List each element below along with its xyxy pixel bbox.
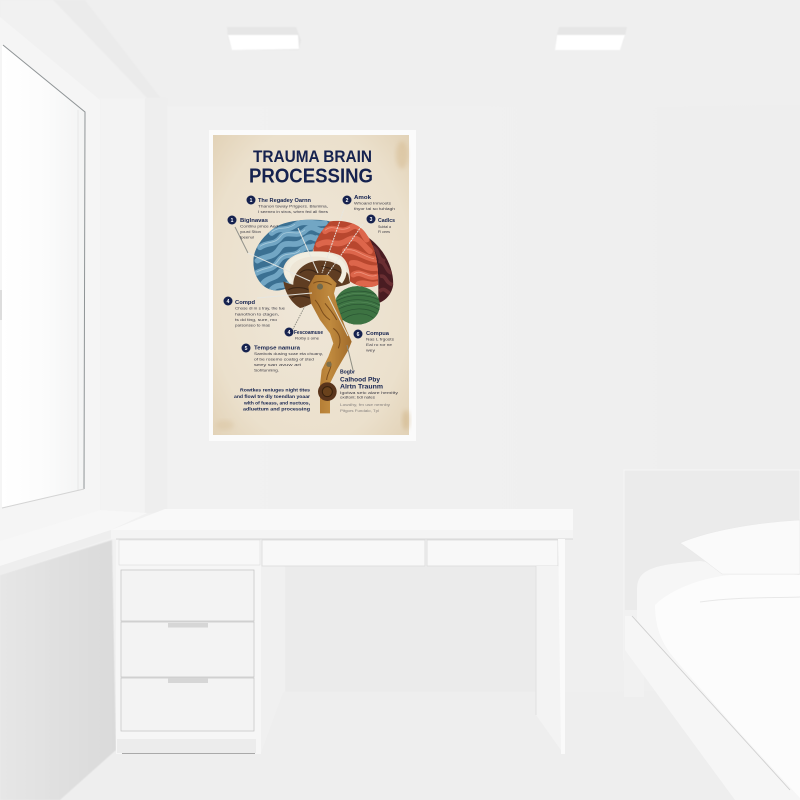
label: compua: Nas L frgosts (366, 336, 394, 342)
label: fescoamuse (284, 328, 323, 340)
label: tempse namura: Sambots dusing scae eta chuany, (254, 351, 323, 356)
label: compd (224, 296, 285, 328)
label: amok: Whoand Innvoots (354, 200, 391, 206)
label: amok: Amok (354, 195, 371, 201)
dark rear lobe (368, 238, 394, 303)
label: compua: Compua (366, 331, 390, 337)
callout: childhood after trauma: Pitgors Fundalo, Tpl (340, 408, 379, 413)
label: biglnavas: Ipeenul (240, 234, 254, 240)
label: cadlcs: Fl cees (378, 229, 390, 234)
headboard (624, 470, 800, 697)
label: biglnavas: Biglnavas (240, 218, 268, 224)
callout: childhood after trauma (340, 370, 398, 413)
callout: childhood after trauma: Alrtn Traunm (340, 384, 383, 390)
label: tempse namura: seey san avuw art (254, 362, 302, 367)
white arch (287, 254, 344, 282)
summary text block: adluettum and processing (243, 406, 310, 412)
right leg (536, 539, 565, 754)
duvet (655, 575, 800, 800)
brain illustration (252, 218, 395, 325)
label: the regulatory brain: I seeneo in stros, when fed all fines (258, 209, 328, 214)
label: tempse namura (242, 344, 323, 372)
stem knob (318, 382, 337, 401)
label: compua (354, 330, 394, 352)
label: the regulatory brain: 1 (250, 198, 253, 204)
title: TRAUMA BRAIN (253, 148, 372, 166)
label: amok (342, 195, 395, 211)
bed (624, 470, 800, 800)
label: cadlcs: Subtal a (378, 224, 392, 229)
pillow (680, 520, 800, 574)
label: fescoamuse: Fescoamuse (294, 330, 323, 336)
label: biglnavas: yourd Stion (240, 229, 261, 234)
ceiling light right (555, 27, 627, 50)
desk top (111, 509, 573, 539)
summary text block: wlth of fueass, and nuctuos, (243, 400, 311, 406)
title (249, 148, 373, 188)
label: compd: 4 (227, 299, 230, 305)
callout: childhood after trauma: Igotwa setc alare hemitty (340, 390, 398, 395)
window (0, 17, 147, 575)
label: compua: Eal ro ror ne (366, 342, 392, 347)
label: fescoamuse: 4 (288, 330, 291, 336)
callout: childhood after trauma: Lowdhy, fm use nennby (340, 402, 390, 407)
label: compd: ts dd ting, sure, mo (235, 317, 277, 322)
label: the regulatory brain: The Regadey Oarnn (258, 198, 311, 204)
label: biglnavas: 1 (231, 218, 234, 224)
poster frame and paper (209, 130, 416, 441)
bed frame rail (625, 616, 800, 800)
label: fescoamuse: Rolby s ome (295, 336, 319, 340)
label: compd: Compd (235, 300, 255, 306)
callout: childhood after trauma: Bogbr (340, 370, 356, 376)
label: amok: 2 (346, 198, 349, 204)
label: tempse namura: Sohtunning. (254, 368, 279, 372)
summary text block: and flowl tre dly toendlan yoaar (234, 394, 310, 400)
desk (111, 509, 573, 754)
label: tempse namura: of be rosemo coatsg of sted (254, 356, 314, 362)
poster (209, 130, 416, 441)
callout: childhood after trauma: Calhood Pby (340, 376, 380, 384)
ceiling light left (227, 27, 301, 50)
label: biglnavas (228, 216, 278, 240)
midbrain dark tissue (283, 260, 350, 308)
label: compd: hanothon to ctagen, (235, 312, 279, 316)
label: compd: parsonseo to mas (235, 322, 270, 328)
title: PROCESSING (249, 166, 373, 188)
green cerebellum (335, 286, 380, 325)
centre and right drawers (262, 540, 558, 566)
label: cadlcs: Cadlcs (378, 218, 395, 224)
stem nodes (317, 284, 332, 367)
brain stem (308, 275, 352, 413)
label: cadlcs: 3 (370, 217, 373, 223)
label: compd: Chose dl m s tray, the tue (235, 306, 285, 310)
label: biglnavas: Contlnu pmce Aed (240, 224, 278, 228)
label: tempse namura: 5 (245, 346, 248, 352)
red lobe (312, 220, 380, 290)
mattress (637, 561, 800, 790)
summary text block (234, 388, 311, 412)
label: amok: thyor tal so tuhlagh (354, 206, 395, 211)
leader lines (235, 206, 363, 370)
label: compua: 6 (357, 332, 360, 338)
label: tempse namura: Tempse namura (254, 346, 301, 352)
blue lobe (252, 218, 332, 293)
label: compua: wey (366, 348, 375, 352)
cabinet (116, 540, 284, 754)
callout: childhood after trauma: oxdtonl; bdl nates (340, 394, 375, 400)
label: cadlcs (366, 214, 395, 234)
summary text block: Rowtkes reniuges night tites (240, 388, 310, 394)
label: the regulatory brain (246, 196, 328, 214)
label: the regulatory brain: Thanon toway Prigpers. Blumina, (258, 204, 328, 208)
